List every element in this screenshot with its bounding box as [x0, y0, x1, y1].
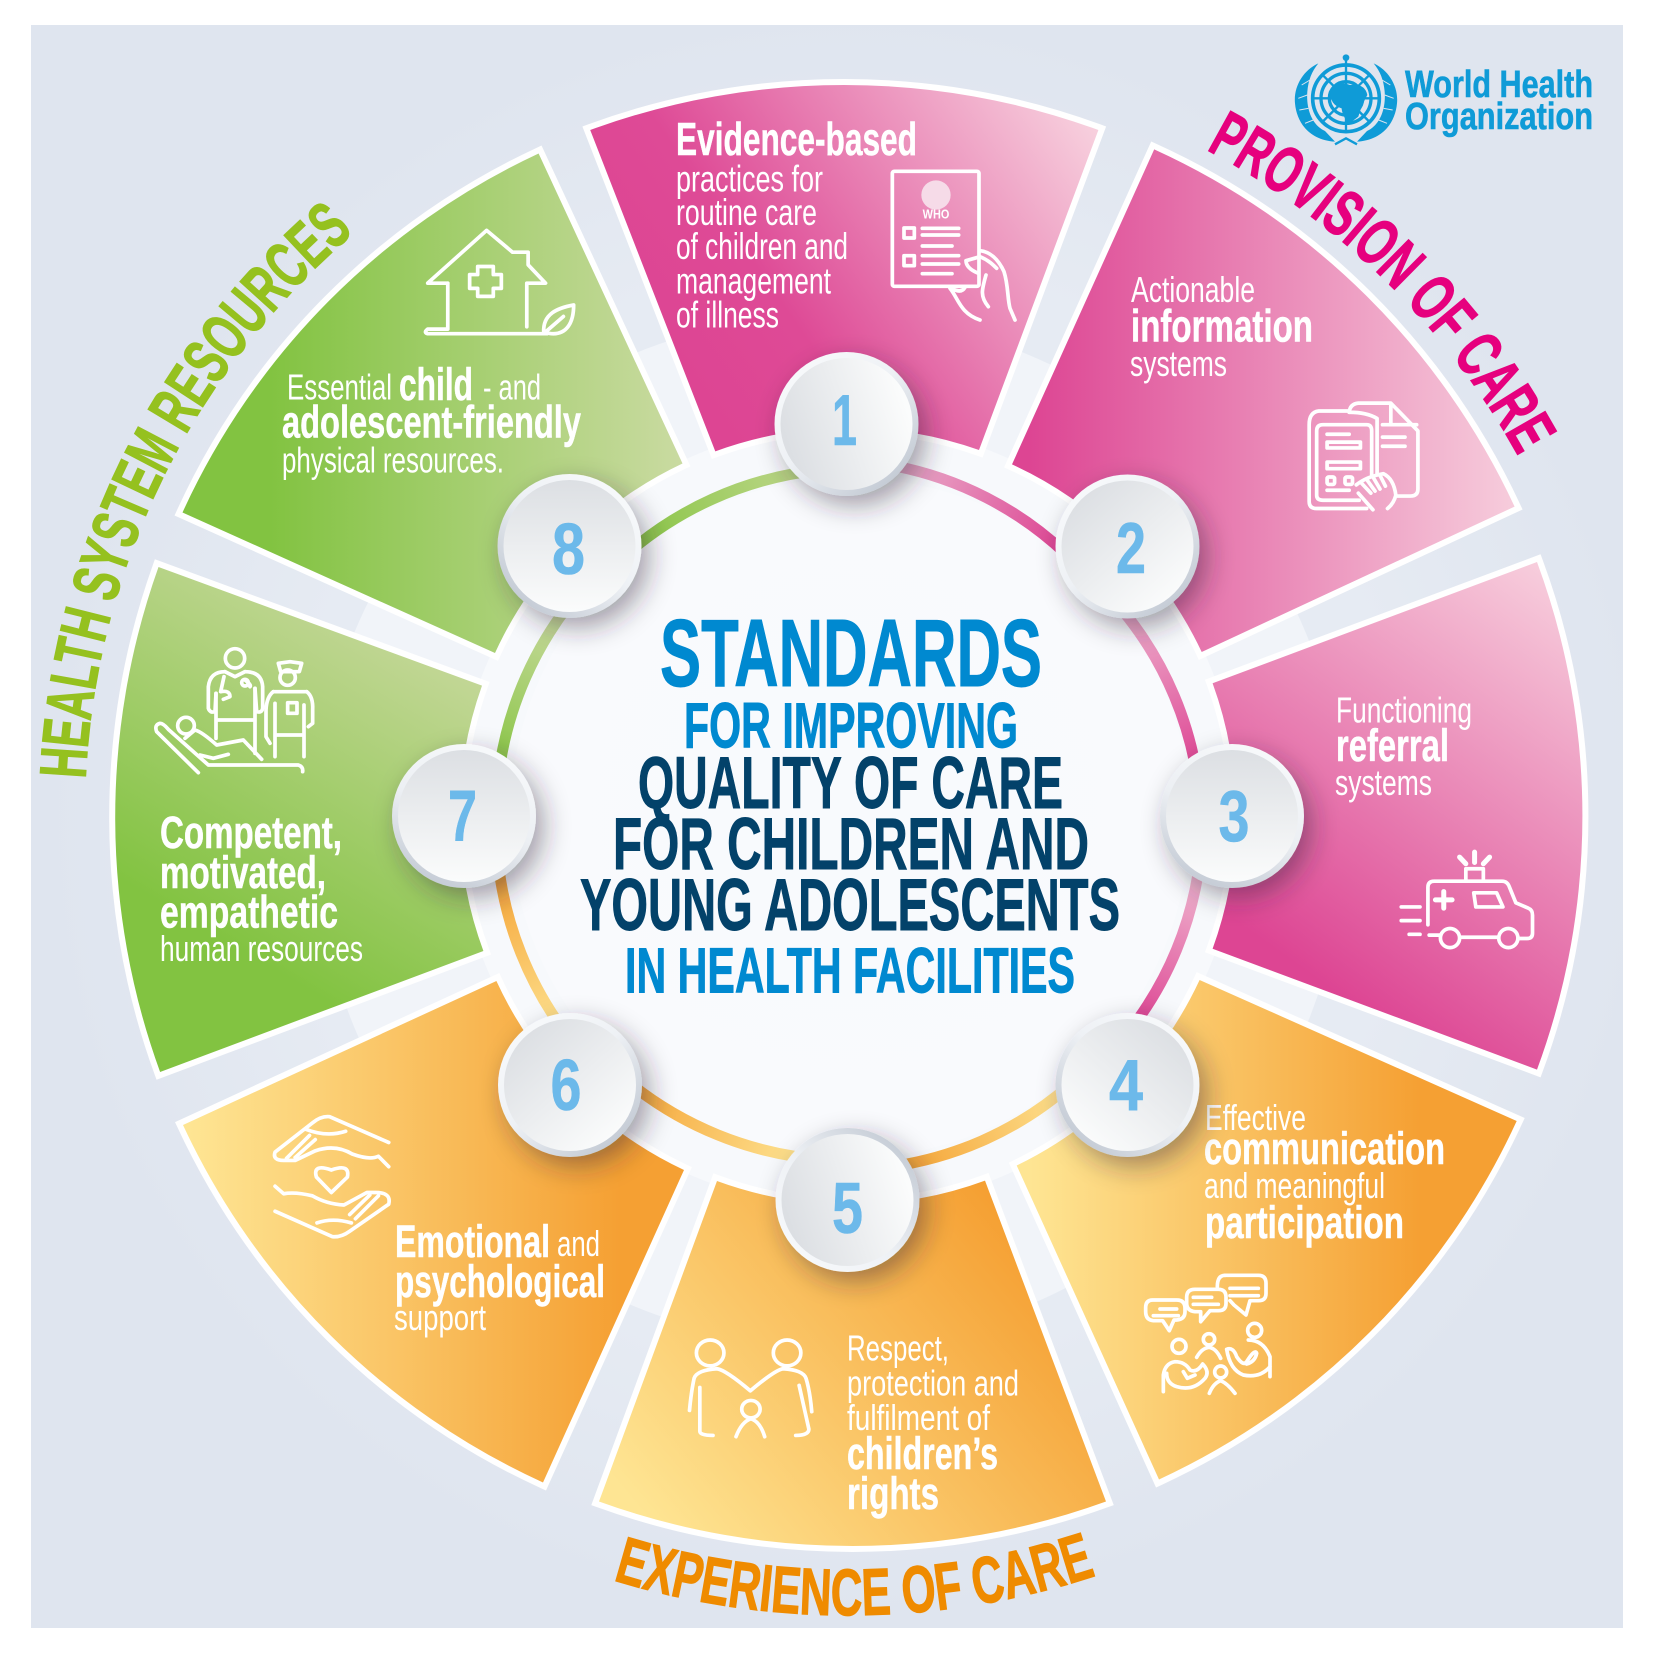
centre title: FOR CHILDREN AND [613, 804, 1089, 885]
number badge 2 [1056, 474, 1200, 618]
icon: ambulance [1401, 852, 1533, 948]
text: standard 7: Competent, [160, 807, 342, 858]
central disc [510, 478, 1190, 1158]
ring segment 2-3 [1118, 605, 1200, 800]
panel: standard 3 functioning referral systems [1213, 562, 1582, 1070]
number badge 6: 6 [550, 1046, 582, 1126]
text: standard 1: of children and [676, 226, 848, 267]
text: standard 5: fulfilment of [847, 1397, 991, 1438]
text: standard 5 [847, 1328, 1019, 1519]
panel: standard 7 competent human resources [115, 567, 483, 1072]
icon: health facility house with leaf [425, 230, 574, 334]
text: standard 6: support [394, 1297, 486, 1338]
ring segment 5-6 [620, 1075, 830, 1160]
centre title: YOUNG ADOLESCENTS [580, 865, 1120, 946]
text: standard 1: practices for [676, 158, 823, 200]
panel: standard 6 emotional and psychological support [183, 981, 684, 1482]
text: standard 3: referral [1336, 720, 1449, 771]
text: standard 5: Respect, [847, 1328, 949, 1368]
number badge 1: 1 [832, 381, 857, 461]
icon: WHO emblem [1295, 54, 1397, 144]
number badge 2: 2 [1116, 509, 1146, 589]
inner light disc behind wheel [315, 315, 1345, 1345]
text: standard 1: Evidence-based [676, 113, 917, 165]
text: standard 3: systems [1335, 762, 1432, 803]
panel: standard 2 actionable information systems [1012, 149, 1515, 652]
text: standard 5: children’s [847, 1428, 998, 1479]
text: standard 8: - and [483, 366, 541, 408]
panel: standard 5 respect and children's rights [599, 1181, 1106, 1546]
inner band behind ring [456, 424, 1240, 1208]
text: standard 6 [394, 1216, 605, 1338]
icon: speech bubbles and families [1146, 1275, 1270, 1393]
text: standard 1: of illness [676, 294, 779, 336]
text: standard 2: systems [1130, 343, 1227, 384]
text: standard 6: and [557, 1223, 600, 1264]
number badge 5: 5 [832, 1169, 863, 1249]
text: standard 6: psychological [395, 1256, 605, 1307]
text: standard 1: management [676, 260, 832, 302]
centre title [580, 600, 1120, 1006]
arc title: provision of care: PROVISION OF CARE [1208, 110, 1558, 456]
number badge 7 [392, 744, 536, 888]
text: standard 8: adolescent-friendly [282, 396, 581, 448]
icon: parents and child [689, 1340, 812, 1437]
text: standard 7: motivated, [160, 847, 326, 898]
ring segment 4-5 [880, 1085, 1070, 1168]
panel: standard 8 physical resources [182, 154, 682, 653]
number badge 1 [774, 352, 918, 496]
text: standard 8: physical resources. [282, 440, 504, 480]
text: standard 4: Effective [1205, 1097, 1306, 1138]
text: standard 5: rights [847, 1468, 939, 1519]
WHO logo [1295, 54, 1593, 144]
arc title: experience of care: EXPERIENCE OF CARE [615, 1532, 1096, 1616]
icon: documents and tablet [1309, 403, 1418, 510]
text: standard 7 [160, 807, 363, 969]
icon: WHO document held in hand [892, 171, 1015, 320]
ring segment 7-8 [497, 580, 590, 790]
text: standard 2 [1130, 269, 1313, 384]
icon: hands protecting heart [274, 1117, 389, 1237]
ring segment 8-1 [620, 470, 820, 560]
centre title: QUALITY OF CARE [638, 743, 1063, 824]
centre title: IN HEALTH FACILITIES [625, 934, 1075, 1006]
text: standard 4: and meaningful [1204, 1165, 1385, 1206]
number badge 5 [776, 1128, 920, 1272]
number badge 4 [1056, 1013, 1200, 1157]
text: standard 8: child [399, 359, 473, 410]
panel: standard 4 effective communication [1017, 980, 1517, 1480]
text: standard 4: participation [1205, 1197, 1404, 1248]
text: standard 7: empathetic [160, 886, 338, 938]
icon: health workers and patient [156, 649, 313, 773]
text: standard 4: communication [1204, 1123, 1445, 1174]
number badge 6 [498, 1013, 642, 1157]
number badge 3 [1160, 744, 1304, 888]
logo wordmark: Organization [1405, 96, 1593, 138]
logo wordmark [1405, 64, 1593, 138]
text: standard 1: routine care [676, 192, 817, 233]
arc title: health system resources: HEALTH SYSTEM RESOURCES [40, 203, 350, 777]
text: standard 7: human resources [160, 928, 363, 969]
centre title: STANDARDS [660, 600, 1042, 707]
number badge 8 [498, 474, 642, 618]
text: standard 1 [676, 113, 917, 336]
text: standard 8 [282, 359, 581, 480]
ring segment 3-4 [1130, 860, 1200, 1030]
text: standard 2: Actionable [1131, 269, 1255, 310]
text: standard 3: Functioning [1336, 690, 1472, 730]
number badge 8: 8 [552, 510, 585, 590]
ring segment 6-7 [497, 850, 575, 1045]
centre title: FOR IMPROVING [684, 690, 1018, 762]
number badge 3: 3 [1218, 777, 1250, 857]
number badge 4: 4 [1109, 1046, 1143, 1126]
text: standard 3 [1335, 690, 1472, 803]
number badge 7: 7 [448, 776, 477, 856]
text: standard 5: protection and [847, 1362, 1019, 1404]
text: standard 2: information [1131, 300, 1313, 352]
text: standard 4 [1204, 1097, 1445, 1248]
ring segment 1-2 [895, 466, 1065, 553]
panel: standard 1 evidence-based practices [590, 85, 1098, 451]
logo wordmark: World Health [1405, 64, 1593, 106]
text: standard 8: Essential [287, 366, 392, 408]
icon: WHO document held in hand: WHO [923, 207, 949, 222]
text: standard 6: Emotional [395, 1216, 550, 1267]
